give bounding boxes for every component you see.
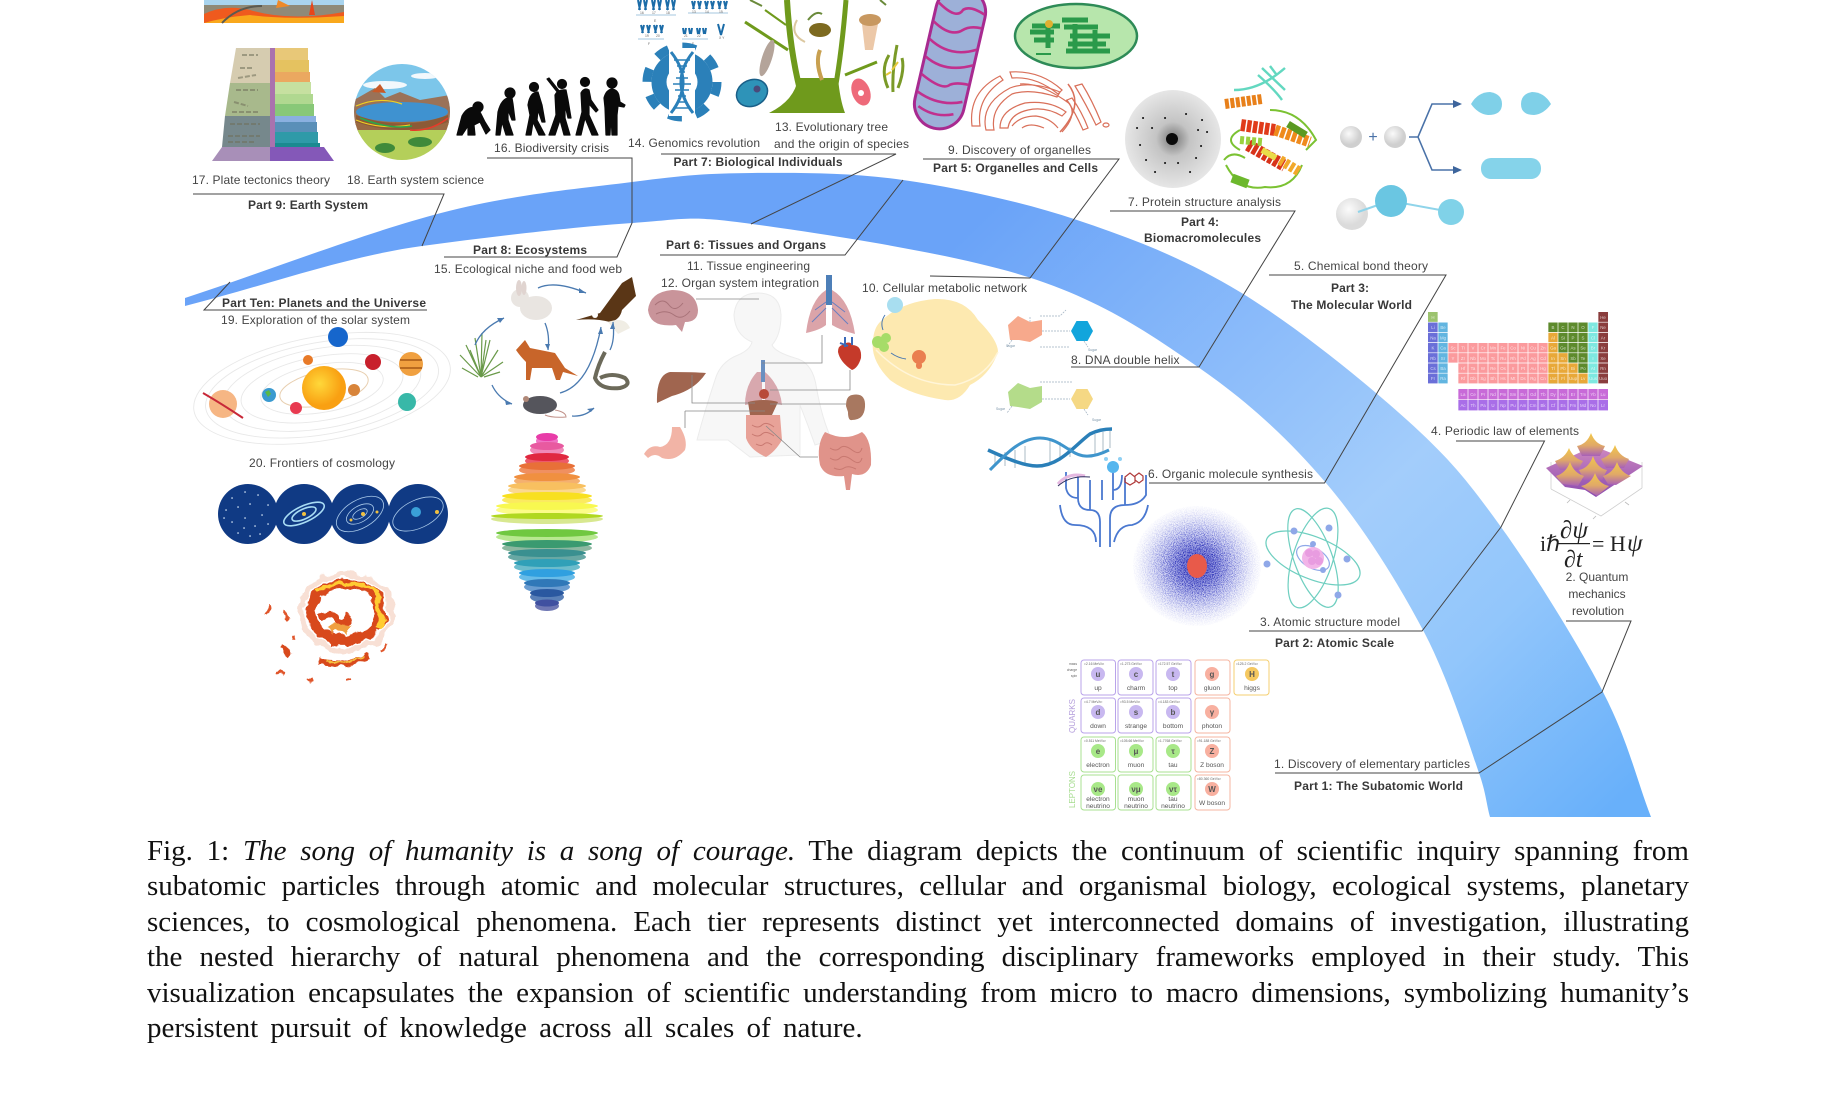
periodic table of elements: Eu — [1520, 392, 1526, 397]
lepton and boson cards row 3: e — [1096, 747, 1101, 756]
periodic table of elements: Lu — [1601, 392, 1606, 397]
mouse — [523, 396, 566, 417]
kidney — [846, 394, 865, 420]
periodic table of elements: Fe — [1500, 346, 1506, 351]
fox — [516, 340, 578, 380]
label: 2 Quantum mechanics: 2. Quantum — [1566, 570, 1628, 584]
icon: base pair adenine thymine guanine cytosine: Sugar — [1006, 344, 1016, 348]
periodic table of elements: Tc — [1491, 356, 1496, 361]
lepton and boson cards row 4: electron — [1086, 796, 1110, 803]
stomach — [644, 427, 686, 459]
quark and boson cards row 1: ≈2.16 MeV/c² — [1084, 662, 1105, 666]
periodic table of elements: Yb — [1590, 392, 1596, 397]
icon: cosmology scale circles — [218, 484, 448, 544]
caption: visualization encapsulates the expansion of scientific understanding from micro to macro dimensions, symbolizing humanity’s — [147, 977, 1689, 1009]
periodic table of elements: Ba — [1440, 366, 1446, 371]
periodic table of elements: Xe — [1600, 356, 1606, 361]
periodic table of elements: Be — [1440, 325, 1446, 330]
icon: chromosome karyotype: 20 — [656, 34, 660, 38]
label: 20 Cosmology: 20. Frontiers of cosmology — [249, 456, 395, 470]
snake — [595, 352, 628, 388]
lepton and boson cards row 4: W boson — [1199, 800, 1225, 807]
periodic table of elements: Sn — [1560, 356, 1566, 361]
label: 8 DNA: 8. DNA double helix — [1071, 353, 1180, 367]
periodic table of elements: Rf — [1461, 376, 1466, 381]
lepton and boson cards row 4: tau — [1168, 796, 1178, 803]
equation: Schrodinger — [1540, 517, 1643, 573]
heading: Part 8: Part 8: Ecosystems — [473, 243, 587, 257]
icon: chemical bond reaction — [1336, 92, 1551, 230]
periodic table of elements: La — [1461, 392, 1466, 397]
periodic table of elements: Ar — [1601, 335, 1606, 340]
periodic table of elements: Mg — [1440, 335, 1447, 340]
heading: Part 7: Part 7: Biological Individuals — [674, 155, 843, 169]
periodic table of elements: Ni — [1521, 346, 1525, 351]
lepton and boson cards row 4: neutrino — [1124, 803, 1148, 810]
table: standard model particles — [1067, 660, 1269, 810]
quark and boson cards row 1: u — [1096, 670, 1101, 679]
icon: organic synthesis tree — [1058, 457, 1148, 547]
heading: Part 3: Part 3: — [1331, 281, 1369, 295]
table: standard model particles: mass — [1069, 662, 1077, 666]
quark and boson cards row 1: g — [1210, 670, 1215, 679]
periodic table of elements: Th — [1470, 403, 1476, 408]
quark and boson cards row 1: c — [1134, 670, 1139, 679]
heading: Part 2: Part 2: Atomic Scale — [1275, 636, 1394, 650]
lepton and boson cards row 3: μ — [1134, 747, 1139, 756]
periodic table of elements: Mn — [1490, 346, 1497, 351]
label: 17 Plate tectonics: 17. Plate tectonics theory — [192, 173, 330, 187]
lepton and boson cards row 3: ≈0.511 MeV/c² — [1084, 739, 1107, 743]
periodic table of elements: Ds — [1520, 376, 1526, 381]
label: 10 Metabolic network: 10. Cellular metabolic network — [862, 281, 1028, 295]
periodic table of elements: Hg — [1540, 366, 1546, 371]
periodic table of elements: Cu — [1530, 346, 1536, 351]
periodic table of elements: Pr — [1481, 392, 1486, 397]
periodic table of elements: Au — [1530, 366, 1536, 371]
lepton and boson cards row 4 — [1081, 775, 1230, 810]
lepton and boson cards row 4: νe — [1094, 785, 1103, 794]
icon: X-ray diffraction pattern — [1125, 90, 1221, 188]
periodic table of elements — [1428, 312, 1608, 412]
organ connector lines — [685, 299, 850, 457]
periodic table of elements: Sc — [1450, 346, 1456, 351]
table: standard model particles: LEPTONS — [1068, 771, 1077, 808]
periodic table of elements: Rb — [1430, 356, 1436, 361]
periodic table of elements: Ag — [1530, 356, 1536, 361]
food web arrows — [475, 285, 614, 416]
quark and boson cards row 2: ≈4.183 GeV/c² — [1158, 700, 1181, 704]
quark and boson cards row 2 — [1081, 698, 1230, 733]
icon: chromosome karyotype: X Y — [719, 36, 725, 40]
periodic table of elements: Sm — [1510, 392, 1517, 397]
table: standard model particles: charge — [1067, 668, 1077, 672]
periodic table of elements: Dy — [1550, 392, 1556, 397]
icon: chromosome karyotype: 22 — [697, 34, 701, 38]
label: 11 Tissue engineering: 11. Tissue engineering — [687, 259, 810, 273]
periodic table of elements: At — [1591, 366, 1596, 371]
icon: chromosome karyotype: F — [648, 42, 650, 46]
periodic table of elements: Nd — [1490, 392, 1496, 397]
lepton and boson cards row 4: neutrino — [1086, 803, 1110, 810]
eagle — [576, 277, 636, 334]
label: 4 Periodic law: 4. Periodic law of elements — [1431, 424, 1579, 438]
heading: Part 4: Part 4: — [1181, 215, 1219, 229]
quark and boson cards row 1: gluon — [1204, 685, 1220, 692]
quark and boson cards row 1: higgs — [1244, 685, 1261, 692]
periodic table of elements: Sb — [1570, 356, 1576, 361]
lepton and boson cards row 4: ≈80.360 GeV/c² — [1197, 777, 1222, 781]
liver — [657, 372, 706, 403]
quark and boson cards row 1: ≈125.2 GeV/c² — [1236, 662, 1259, 666]
periodic table of elements: Cd — [1540, 356, 1546, 361]
equation: Schrodinger: = H — [1592, 531, 1626, 556]
periodic table of elements: Cn — [1540, 376, 1546, 381]
periodic table of elements: Li — [1431, 325, 1435, 330]
icon: base pair adenine thymine guanine cytosine — [996, 310, 1102, 422]
heading: Biomacromolecules: Biomacromolecules — [1144, 231, 1261, 245]
periodic table of elements: Db — [1470, 376, 1476, 381]
lepton and boson cards row 4: neutrino — [1161, 803, 1185, 810]
lepton and boson cards row 3: tau — [1168, 762, 1178, 769]
periodic table of elements: Fl — [1561, 376, 1565, 381]
connector lines — [193, 154, 1631, 773]
quark and boson cards row 2: d — [1096, 708, 1101, 717]
quark and boson cards row 1: up — [1094, 685, 1102, 692]
icon: chromosome karyotype: 14 — [705, 10, 709, 14]
icon: chromosome karyotype: F — [692, 42, 694, 46]
periodic table of elements: Lr — [1601, 403, 1605, 408]
icon: golgi apparatus — [972, 72, 1109, 132]
periodic table of elements: Fm — [1570, 403, 1577, 408]
periodic table of elements: Ac — [1460, 403, 1466, 408]
periodic table of elements: Zr — [1461, 356, 1466, 361]
periodic table of elements: Mt — [1511, 376, 1516, 381]
lepton and boson cards row 4: ντ — [1169, 785, 1177, 794]
periodic table of elements: Uup — [1569, 376, 1578, 381]
periodic table of elements: Cr — [1481, 346, 1486, 351]
icon: atom model — [1259, 502, 1367, 614]
periodic table of elements: Na — [1430, 335, 1436, 340]
label: 15 Ecological niche: 15. Ecological niche and food web — [434, 262, 622, 276]
icon: chloroplast — [1015, 4, 1137, 68]
lepton and boson cards row 4: W — [1208, 785, 1216, 794]
periodic table of elements: Sg — [1480, 376, 1486, 381]
heading: The Molecular World: The Molecular World — [1291, 298, 1412, 312]
label: 5 Chemical bond: 5. Chemical bond theory — [1294, 259, 1428, 273]
periodic table of elements: Y — [1452, 356, 1455, 361]
periodic table of elements: Tb — [1540, 392, 1546, 397]
periodic table of elements: Po — [1580, 366, 1586, 371]
food web — [460, 277, 636, 417]
caption: sciences, to cosmological phenomena. Each tier represents distinct yet interconnected domains of investigation, illustrating — [147, 906, 1689, 938]
periodic table of elements: Ga — [1550, 346, 1556, 351]
icon: DNA double helix ribbon — [988, 429, 1112, 470]
periodic table of elements: Ho — [1560, 392, 1566, 397]
diagram: human body with organs — [644, 275, 871, 490]
caption: Fig. 1: The song of humanity is a song of courage. The diagram depicts the continuum of scientific inquiry spanning from — [147, 834, 1689, 866]
caption — [147, 834, 1689, 1044]
torso organs — [745, 360, 782, 457]
periodic table of elements: Cf — [1551, 403, 1556, 408]
icon: base pair adenine thymine guanine cytosine: Sugar — [1088, 348, 1098, 352]
equation: Schrodinger: ψ — [1627, 530, 1643, 557]
quark and boson cards row 2: photon — [1202, 723, 1222, 730]
periodic table of elements: Uut — [1550, 376, 1557, 381]
periodic table of elements: Es — [1560, 403, 1566, 408]
periodic table of elements: Np — [1500, 403, 1506, 408]
equation: Schrodinger: iℏ — [1540, 531, 1560, 556]
periodic table of elements: Zn — [1540, 346, 1546, 351]
label: 12 Organ system: 12. Organ system integration — [661, 276, 819, 290]
periodic table of elements: Cl — [1591, 335, 1595, 340]
icon: tectonic cross-section — [204, 0, 344, 23]
periodic table of elements: W — [1481, 366, 1486, 371]
caption: the nested hierarchy of natural phenomena and the corresponding disciplinary frameworks employed in their study. This — [147, 941, 1689, 973]
periodic table of elements: Lv — [1581, 376, 1586, 381]
periodic table of elements: Ca — [1440, 346, 1446, 351]
lepton and boson cards row 3: electron — [1086, 762, 1110, 769]
icon: human evolution silhouettes — [457, 78, 625, 135]
periodic table of elements: Nb — [1470, 356, 1476, 361]
quark and boson cards row 2: down — [1090, 723, 1106, 730]
icon: chromosome karyotype: 21 — [684, 34, 688, 38]
quark and boson cards row 2: b — [1171, 708, 1176, 717]
icon: chromosome karyotype: 13 — [692, 10, 696, 14]
brain — [648, 290, 698, 332]
periodic table of elements: Cm — [1530, 403, 1537, 408]
periodic table of elements: Hs — [1500, 376, 1506, 381]
periodic table of elements: Hf — [1461, 366, 1466, 371]
icon: evolutionary tree of life — [732, 0, 903, 113]
periodic table of elements: Fr — [1431, 376, 1436, 381]
periodic table of elements: Am — [1520, 403, 1527, 408]
periodic table of elements: Kr — [1601, 346, 1606, 351]
periodic table of elements: Te — [1581, 356, 1586, 361]
lepton and boson cards row 3: muon — [1128, 762, 1145, 769]
icon: chromosome karyotype: 15 — [719, 10, 723, 14]
heart — [838, 337, 861, 370]
periodic table of elements: Ir — [1512, 366, 1515, 371]
periodic table of elements: Si — [1561, 335, 1565, 340]
periodic table of elements: O — [1581, 325, 1585, 330]
label: 9 Organelles: 9. Discovery of organelles — [948, 143, 1091, 157]
icon: electron cloud — [1133, 506, 1261, 626]
periodic table of elements: Ru — [1500, 356, 1506, 361]
equation: Schrodinger: ∂t — [1564, 547, 1584, 573]
lepton and boson cards row 4: νμ — [1131, 785, 1141, 794]
icon: chemical bond reaction: + — [1368, 129, 1378, 146]
lepton and boson cards row 4: muon — [1128, 796, 1145, 803]
heading: Part 5: Part 5: Organelles and Cells — [933, 161, 1098, 175]
icon: base pair adenine thymine guanine cytosine: Sugar — [996, 407, 1006, 411]
periodic table of elements: Os — [1500, 366, 1507, 371]
periodic table of elements: Bk — [1540, 403, 1546, 408]
table: standard model particles: QUARKS — [1068, 699, 1077, 733]
table: standard model particles: spin — [1071, 674, 1077, 678]
quark and boson cards row 2: s — [1134, 708, 1139, 717]
periodic table of elements: As — [1570, 346, 1576, 351]
periodic table of elements: Co — [1510, 346, 1516, 351]
label: 2 Quantum mechanics: mechanics — [1568, 587, 1626, 601]
lepton and boson cards row 3: ≈105.66 MeV/c² — [1120, 739, 1145, 743]
periodic table of elements: N — [1571, 325, 1575, 330]
grass — [460, 333, 503, 377]
periodic table of elements: Al — [1551, 335, 1555, 340]
quark and boson cards row 2: bottom — [1163, 723, 1184, 730]
lepton and boson cards row 3 — [1081, 737, 1230, 772]
periodic table of elements: Uus — [1589, 376, 1598, 381]
icon: rainbow biodiversity stack — [491, 433, 603, 611]
quark and boson cards row 1: H — [1249, 670, 1255, 679]
periodic table of elements: U — [1491, 403, 1495, 408]
periodic table of elements: Rn — [1600, 366, 1606, 371]
quark and boson cards row 2: ≈4.7 MeV/c² — [1084, 700, 1103, 704]
periodic table of elements: Bi — [1571, 366, 1575, 371]
periodic table of elements: Ta — [1471, 366, 1476, 371]
lepton and boson cards row 3: ≈1.7768 GeV/c² — [1158, 739, 1183, 743]
heading: Part Ten: Part Ten: Planets and the Universe — [222, 296, 426, 310]
label: 6 Organic synthesis: 6. Organic molecule synthesis — [1148, 467, 1313, 481]
heading: Part 6: Part 6: Tissues and Organs — [666, 238, 826, 252]
periodic table of elements: Pd — [1520, 356, 1526, 361]
chart: quantum probability surface — [1546, 433, 1643, 519]
periodic table of elements: Pm — [1500, 392, 1507, 397]
periodic table of elements: Tl — [1551, 366, 1555, 371]
periodic table of elements: Er — [1571, 392, 1576, 397]
icon: cell metabolic network — [872, 297, 998, 400]
periodic table of elements: No — [1590, 403, 1596, 408]
label: 7 Protein structure: 7. Protein structure analysis — [1128, 195, 1281, 209]
periodic table of elements: Tm — [1580, 392, 1587, 397]
periodic table of elements: Se — [1580, 346, 1586, 351]
body silhouette — [697, 293, 832, 457]
periodic table of elements: Re — [1490, 366, 1496, 371]
icon: chromosome karyotype: 17 — [652, 11, 656, 15]
periodic table of elements: Ge — [1560, 346, 1566, 351]
icon: mitochondrion — [909, 0, 991, 134]
icon: red turbulence swirl — [266, 574, 391, 682]
periodic table of elements: Br — [1591, 346, 1596, 351]
rabbit — [511, 280, 552, 320]
quark and boson cards row 1: top — [1168, 685, 1178, 692]
quark and boson cards row 2: strange — [1125, 723, 1147, 730]
periodic table of elements: Ra — [1440, 376, 1446, 381]
lepton and boson cards row 3: Z boson — [1200, 762, 1224, 769]
arc band: scale of nature — [185, 173, 1651, 817]
icon: chromosome karyotype: 18 — [666, 11, 670, 15]
periodic table of elements: B — [1552, 325, 1555, 330]
lungs — [806, 275, 855, 334]
periodic table of elements: Pa — [1480, 403, 1486, 408]
equation: Schrodinger: ∂ψ — [1560, 517, 1588, 544]
periodic table of elements: Ti — [1461, 346, 1465, 351]
quark and boson cards row 2: ≈93.5 MeV/c² — [1120, 700, 1141, 704]
periodic table of elements: Uuo — [1599, 376, 1608, 381]
lepton and boson cards row 3: τ — [1171, 747, 1175, 756]
periodic table of elements: Rh — [1510, 356, 1516, 361]
periodic table of elements: Gd — [1530, 392, 1536, 397]
icon: gear and DNA — [647, 47, 717, 117]
icon: geologic strata column — [212, 48, 334, 161]
quark and boson cards row 1: t — [1172, 670, 1175, 679]
label: 3 Atomic structure: 3. Atomic structure model — [1260, 615, 1400, 629]
periodic table of elements: In — [1551, 356, 1555, 361]
icon: protein ribbon structure — [1224, 66, 1316, 188]
periodic table of elements: Sr — [1441, 356, 1446, 361]
periodic table of elements: Pb — [1560, 366, 1566, 371]
periodic table of elements: K — [1432, 346, 1435, 351]
icon: base pair adenine thymine guanine cytosine: Sugar — [1092, 418, 1102, 422]
label: 16 Biodiversity: 16. Biodiversity crisis — [494, 141, 609, 155]
quark and boson cards row 1: ≈1.273 GeV/c² — [1120, 662, 1143, 666]
periodic table of elements: Pt — [1521, 366, 1526, 371]
label: 13 continued: and the origin of species — [774, 137, 909, 151]
periodic table of elements: Ce — [1470, 392, 1476, 397]
lepton and boson cards row 3: ≈91.188 GeV/c² — [1197, 739, 1222, 743]
label: 13 Evolutionary tree: 13. Evolutionary tree — [775, 120, 888, 134]
icon: chromosome karyotype: 19 — [645, 34, 649, 38]
periodic table of elements: Mo — [1480, 356, 1487, 361]
icon: solar system — [185, 315, 459, 462]
quark and boson cards row 1: ≈172.57 GeV/c² — [1158, 662, 1183, 666]
label: 18 Earth system: 18. Earth system science — [347, 173, 484, 187]
intestines — [819, 432, 871, 490]
periodic table of elements: C — [1561, 325, 1565, 330]
quark and boson cards row 1 — [1081, 660, 1269, 695]
periodic table of elements: H — [1431, 315, 1435, 320]
periodic table of elements: V — [1472, 346, 1475, 351]
periodic table of elements: Md — [1580, 403, 1587, 408]
label: 2 Quantum mechanics: revolution — [1572, 604, 1624, 618]
periodic table of elements: Cs — [1430, 366, 1436, 371]
icon: chromosome karyotype: 16 — [640, 11, 644, 15]
periodic table of elements: P — [1572, 335, 1575, 340]
periodic table of elements: Pu — [1510, 403, 1516, 408]
icon: chromosome karyotype: E — [654, 19, 657, 23]
lepton and boson cards row 3: Z — [1210, 747, 1215, 756]
quark and boson cards row 2: γ — [1210, 708, 1215, 717]
periodic table of elements: Ne — [1600, 325, 1606, 330]
quark and boson cards row 1: charm — [1127, 685, 1146, 692]
caption: subatomic particles through atomic and molecular structures, cellular and organismal biology, ecological systems, planetary — [147, 870, 1689, 902]
icon: earth system globe — [354, 64, 450, 160]
periodic table of elements: I — [1592, 356, 1594, 361]
periodic table of elements: Bh — [1490, 376, 1496, 381]
caption: persistent pursuit of knowledge across all scales of nature. — [147, 1012, 863, 1044]
label: 1 Elementary particles: 1. Discovery of elementary particles — [1274, 757, 1470, 771]
label: 14 Genomics: 14. Genomics revolution — [628, 136, 760, 150]
periodic table of elements: S — [1582, 335, 1585, 340]
heading: Part 1: Part 1: The Subatomic World — [1294, 779, 1463, 793]
periodic table of elements: F — [1592, 325, 1595, 330]
label: 19 Solar system: 19. Exploration of the solar system — [221, 313, 410, 327]
icon: chromosome karyotype — [636, 0, 728, 46]
periodic table of elements: Rg — [1530, 376, 1536, 381]
periodic table of elements: He — [1600, 315, 1606, 320]
heading: Part 9: Part 9: Earth System — [248, 198, 368, 212]
